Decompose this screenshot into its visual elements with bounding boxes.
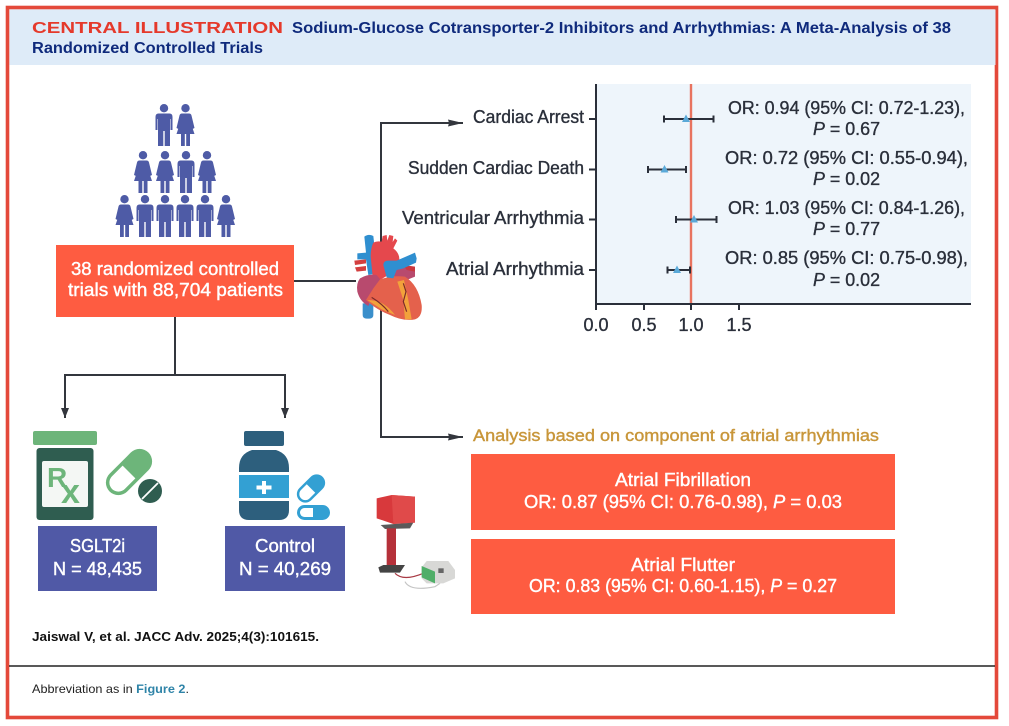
row: cardiac arrest: Cardiac Arrest <box>473 107 584 127</box>
icon: prescription bottle and pills <box>33 431 162 520</box>
x-axis labels: 0.0 <box>583 315 609 335</box>
plot background <box>596 84 971 304</box>
row: atrial arrhythmia: P = 0.02 <box>813 270 880 290</box>
x-axis labels: 0.5 <box>631 315 657 335</box>
box: control arm <box>225 526 345 591</box>
icon: prescription bottle and pills: R <box>47 462 67 493</box>
box: SGLT2i arm: N = 48,435 <box>53 559 142 579</box>
box: atrial fibrillation: Atrial Fibrillation <box>615 470 751 490</box>
row: atrial arrhythmia: OR: 0.85 (95% CI: 0.75-0.98), <box>725 248 968 268</box>
box: control arm: Control <box>255 536 315 556</box>
chart: forest plot <box>402 84 971 335</box>
box: atrial flutter: Atrial Flutter <box>631 555 735 575</box>
box: study population: 38 randomized controlled <box>71 259 279 279</box>
row: sudden cardiac death <box>408 148 968 189</box>
reference line at 1.0 <box>690 84 692 304</box>
box: control arm: N = 40,269 <box>239 559 331 579</box>
box: study population: trials with 88,704 patients <box>68 280 283 300</box>
row: cardiac arrest <box>473 98 965 139</box>
box: study population <box>56 245 294 317</box>
row: sudden cardiac death: Sudden Cardiac Death <box>408 158 584 178</box>
icon: heart <box>354 235 422 320</box>
icon: prescription bottle and pills: x <box>61 473 80 511</box>
heading: atrial arrhythmia components: Analysis based on component of atrial arrhythmias <box>473 426 879 445</box>
x-axis labels: 1.5 <box>726 315 752 335</box>
row: atrial arrhythmia: Atrial Arrhythmia <box>446 259 585 279</box>
axes and ticks <box>589 84 971 310</box>
row: ventricular arrhythmia: P = 0.77 <box>813 219 880 239</box>
citation: Jaiswal V, et al. JACC Adv. 2025;4(3):101615. <box>32 629 319 644</box>
title line 1: Sodium-Glucose Cotransporter-2 Inhibitors and Arrhythmias: A Meta-Analysis of 38 <box>292 20 951 37</box>
icon: control bottle and pills <box>239 431 330 520</box>
row: cardiac arrest: OR: 0.94 (95% CI: 0.72-1.23), <box>728 98 965 118</box>
box: SGLT2i arm: SGLT2i <box>70 536 125 556</box>
box: atrial fibrillation: OR: 0.87 (95% CI: 0.76-0.98), P = 0.03 <box>524 492 842 512</box>
x-axis labels <box>583 315 752 335</box>
box: atrial fibrillation <box>471 454 895 530</box>
abbreviation note: Abbreviation as in Figure 2. <box>32 682 189 696</box>
row: ventricular arrhythmia <box>402 198 965 239</box>
icon: group of patients <box>116 104 235 237</box>
box: SGLT2i arm <box>38 526 157 591</box>
connector lines and arrows <box>65 123 463 437</box>
box: atrial flutter <box>471 539 895 614</box>
row: ventricular arrhythmia: OR: 1.03 (95% CI: 0.84-1.26), <box>728 198 965 218</box>
row: sudden cardiac death: P = 0.02 <box>813 169 880 189</box>
row: atrial arrhythmia <box>446 248 968 290</box>
x-axis labels: 1.0 <box>678 315 704 335</box>
row: cardiac arrest: P = 0.67 <box>813 119 880 139</box>
title label: central illustration: CENTRAL ILLUSTRATION <box>32 20 283 37</box>
box: atrial flutter: OR: 0.83 (95% CI: 0.60-1.15), P = 0.27 <box>529 576 837 596</box>
header band <box>10 10 996 65</box>
row: ventricular arrhythmia: Ventricular Arrhythmia <box>402 208 585 228</box>
icon: cardiac device <box>377 495 455 588</box>
row: sudden cardiac death: OR: 0.72 (95% CI: 0.55-0.94), <box>725 148 968 168</box>
title line 2: Randomized Controlled Trials <box>32 40 263 57</box>
